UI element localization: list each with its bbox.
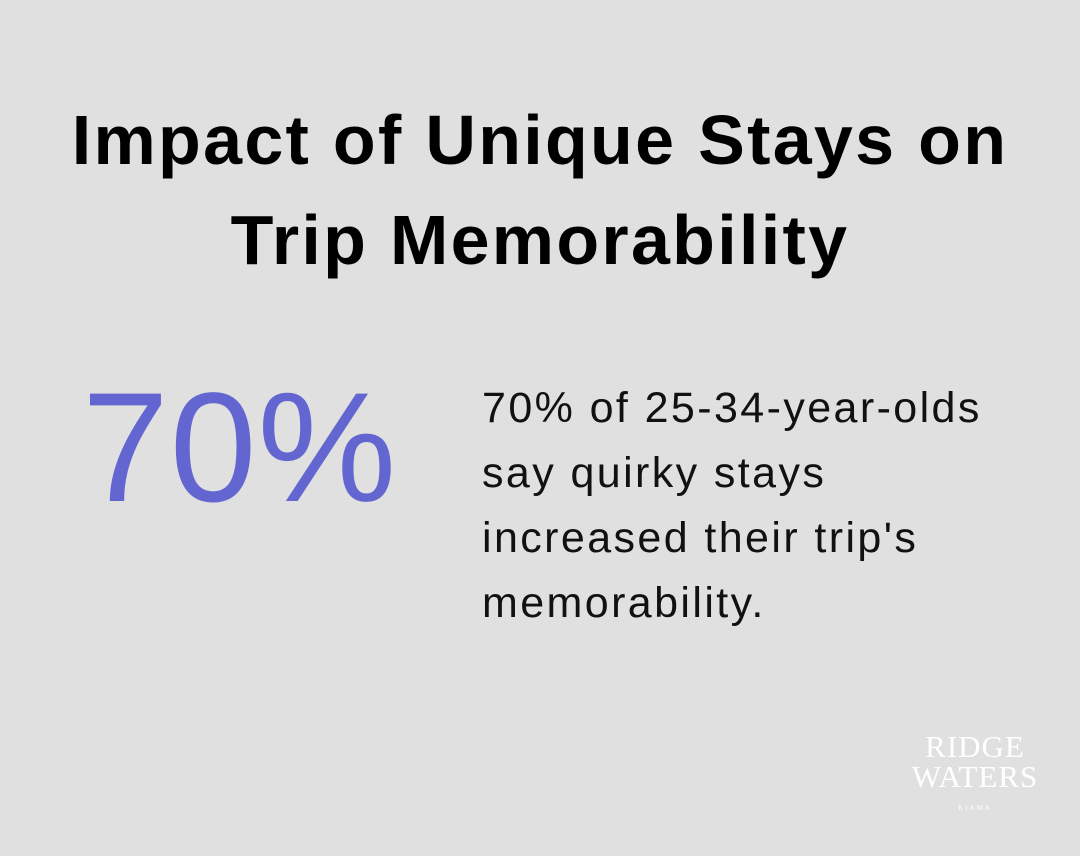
description: 70% of 25-34-year-olds [482,384,982,432]
description [482,384,982,627]
title [72,101,1008,279]
logo: RIDGE [925,729,1025,764]
description: say quirky stays [482,449,826,497]
big stat: 70% [82,361,397,535]
description: memorability. [482,579,766,627]
title: Impact of Unique Stays on [72,101,1008,179]
title: Trip Memorability [231,201,849,279]
description: increased their trip's [482,514,918,562]
logo [912,729,1038,812]
logo: WATERS [912,759,1038,794]
logo: KIAMA [958,804,992,812]
